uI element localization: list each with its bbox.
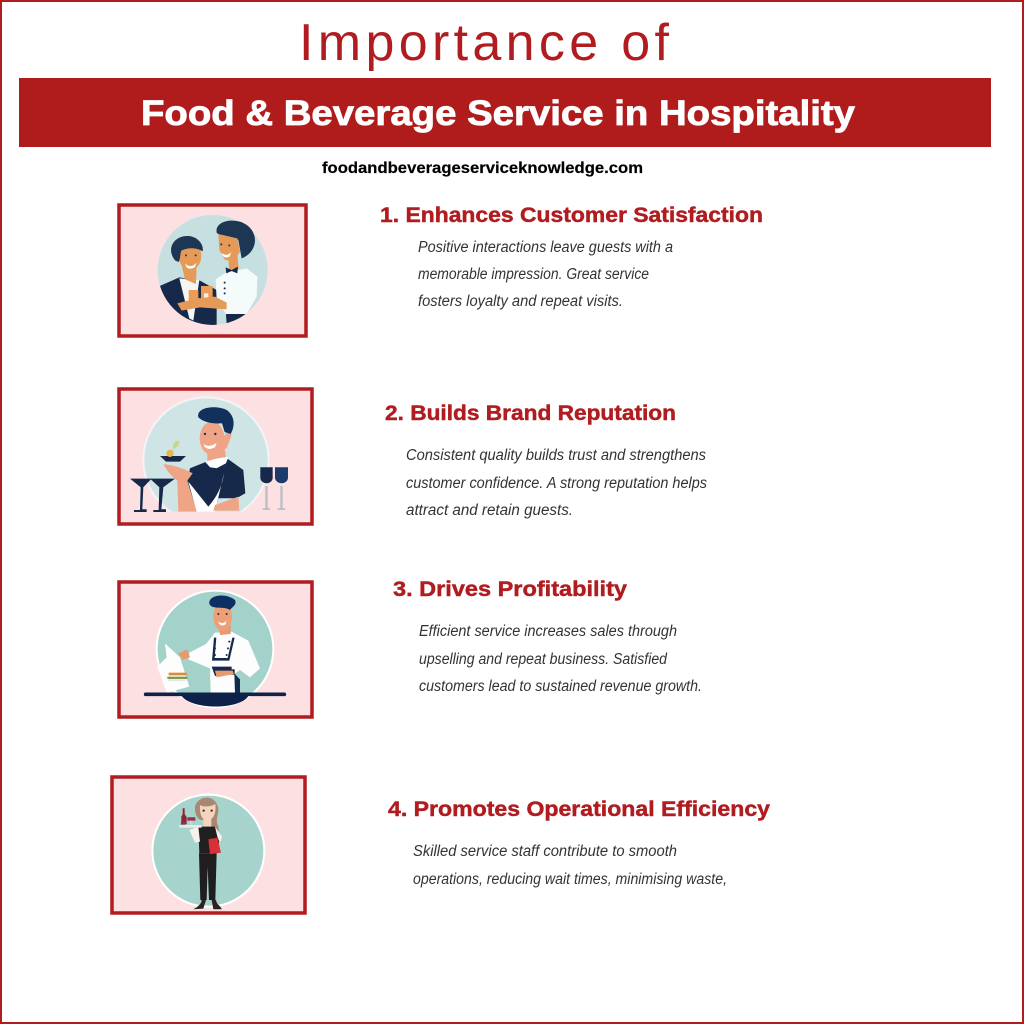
text: item 2: customer confidence. A strong reputation helps (406, 475, 707, 492)
text: item 1: Positive interactions leave guests with a (418, 239, 673, 256)
heading: item 3: 3. Drives Profitability (393, 578, 627, 601)
text: item 1 (418, 239, 673, 310)
text: item 3: upselling and repeat business. Satisfied (419, 651, 668, 668)
heading: item 4: 4. Promotes Operational Efficiency (388, 798, 770, 821)
text: item 4: Skilled service staff contribute to smooth (413, 843, 677, 860)
heading: item 2: 2. Builds Brand Reputation (385, 402, 676, 425)
text: item 4: operations, reducing wait times, minimising waste, (413, 871, 727, 888)
text: item 2: Consistent quality builds trust and strengthens (406, 447, 706, 464)
text: item 1: fosters loyalty and repeat visits. (418, 293, 623, 310)
website url: foodandbeverageserviceknowledge.com (322, 160, 643, 177)
banner (19, 78, 991, 147)
text: item 2 (406, 447, 707, 519)
panel: item 3 image (119, 582, 312, 717)
panel: item 2 image (119, 389, 312, 524)
text: item 3: customers lead to sustained revenue growth. (419, 678, 702, 695)
text: item 4 (413, 843, 727, 888)
text: item 1: memorable impression. Great service (418, 266, 649, 283)
heading: item 1: 1. Enhances Customer Satisfaction (380, 204, 763, 227)
text: item 2: attract and retain guests. (406, 502, 573, 519)
panel: item 1 image (119, 205, 306, 336)
banner: Food & Beverage Service in Hospitality (141, 94, 856, 133)
panel: item 4 image (112, 777, 305, 913)
text: item 3: Efficient service increases sales through (419, 623, 677, 640)
title: Importance of (299, 14, 670, 72)
text: item 3 (419, 623, 702, 695)
